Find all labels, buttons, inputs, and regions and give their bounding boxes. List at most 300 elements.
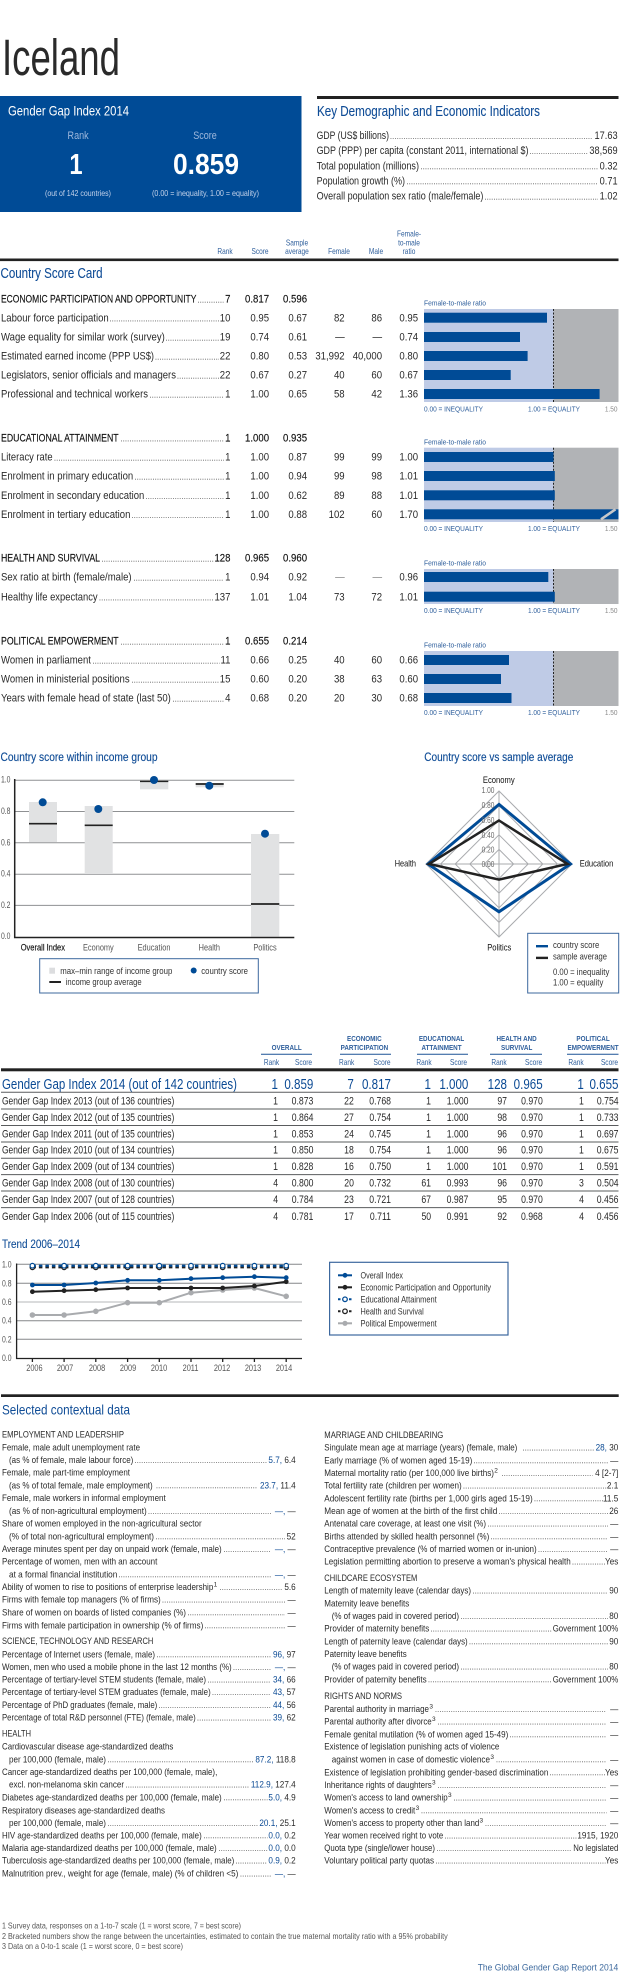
panel: childcare ecosystem: Provider of paternity benefits	[324, 1674, 427, 1684]
line chart: trend 2006-2014: 2008	[89, 1363, 106, 1373]
table column headers: Score	[450, 1057, 467, 1067]
indicator rows: 38	[334, 674, 345, 686]
indicator rows: 1.00	[399, 452, 418, 464]
line chart: trend 2006-2014	[2, 1260, 302, 1373]
chart: country score within income group: Politics	[253, 943, 277, 953]
indicator rows: 1	[225, 572, 231, 584]
historical rows: 92	[497, 1211, 507, 1223]
legend: radar chart: 0.00 = inequality	[553, 967, 610, 977]
table column headers: Rank	[264, 1057, 279, 1067]
line chart: trend 2006-2014: 1.0	[2, 1260, 12, 1270]
panel: employment and leadership: (as % of non-agricultural employment)	[9, 1506, 147, 1516]
historical rows: 0.721	[369, 1194, 391, 1206]
panel: employment and leadership: Firms with female participation in ownership (% of firms)	[2, 1620, 203, 1630]
chart: country score within income group: 0.6	[1, 837, 11, 848]
legend: income group chart	[40, 959, 258, 993]
section row: EDUCATIONAL ATTAINMENT	[1, 432, 119, 444]
indicator rows: 1.00	[250, 389, 269, 401]
historical rows: 0.970	[521, 1145, 543, 1157]
indicator rows: 10	[220, 313, 231, 325]
section row: 0.960	[283, 553, 307, 565]
score card column headers: Sample	[286, 238, 308, 248]
indicator rows: 89	[334, 491, 345, 502]
historical rows: Gender Gap Index 2007 (out of 128 countries)	[2, 1194, 174, 1206]
radar chart: country score vs sample average	[395, 774, 613, 952]
section row: 0.935	[283, 433, 307, 445]
section row: POLITICAL EMPOWERMENT	[1, 636, 119, 648]
bar chart: female-to-male ratio: 1.00 = EQUALITY	[528, 708, 580, 717]
section row: ECONOMIC PARTICIPATION AND OPPORTUNITY	[1, 294, 197, 306]
panel: rights and norms: Quota type (single/lower house)	[324, 1843, 435, 1853]
indicator rows: 99	[334, 452, 345, 464]
section row: 0.655	[245, 636, 269, 648]
line chart: trend 2006-2014: 2011	[183, 1363, 199, 1373]
title: Iceland	[2, 29, 120, 86]
panel: economic participation and opportunity	[1, 294, 618, 414]
panel: employment and leadership: —	[288, 1620, 296, 1630]
indicator rows: 0.95	[399, 313, 418, 325]
row: 2014 highlighted: 1	[272, 1076, 278, 1092]
panel: employment and leadership: 23.7, 11.4	[260, 1480, 296, 1490]
historical rows: Gender Gap Index 2013 (out of 136 countries)	[2, 1096, 174, 1108]
line chart: trend 2006-2014: 2012	[214, 1363, 231, 1373]
historical rows: 0.970	[521, 1096, 543, 1108]
bar chart: female-to-male ratio	[424, 640, 618, 717]
historical rows: 17	[344, 1211, 354, 1223]
panel: employment and leadership: at a formal financial institution	[9, 1569, 117, 1579]
bar chart: female-to-male ratio: 0.00 = INEQUALITY	[424, 708, 483, 717]
panel: marriage and childbearing: —	[610, 1518, 619, 1529]
row: 2014 highlighted: 1.000	[439, 1076, 468, 1092]
panel: Gender Gap Index 2014: (0.00 = inequality, 1.00 = equality)	[152, 188, 259, 198]
indicator rows: Labour force participation	[1, 312, 109, 324]
historical rows: 0.873	[292, 1096, 313, 1108]
historical rows: 20	[344, 1178, 354, 1190]
historical rows: 23	[344, 1194, 354, 1206]
row: 2014 highlighted: 7	[347, 1076, 354, 1092]
panel: science, technology and research: Percentage of PhD graduates (female, male)	[2, 1700, 157, 1710]
panel: rights and norms: —	[610, 1704, 619, 1714]
panel: health context: 20.1, 25.1	[259, 1818, 296, 1828]
indicator rows: 0.20	[288, 693, 307, 705]
footnotes: 3 Data on a 0-to-1 scale (1 = worst score, 0 = best score)	[2, 1942, 183, 1951]
panel: marriage and childbearing: MARRIAGE AND CHILDBEARING	[324, 1430, 443, 1440]
panel: rights and norms	[324, 1691, 619, 1866]
panel: science, technology and research: —, —	[275, 1662, 296, 1672]
indicator rows: 1.36	[399, 389, 418, 401]
historical rows: 0.784	[292, 1194, 314, 1206]
panel: health context: 112.9, 127.4	[251, 1779, 296, 1790]
row: 2014 highlighted: 1	[577, 1076, 584, 1092]
indicator rows: 0.88	[288, 510, 307, 521]
bar chart: female-to-male ratio: 1.50	[605, 406, 618, 414]
indicator rows: 1	[225, 452, 231, 464]
historical rows: 0.456	[597, 1211, 619, 1223]
panel: Gender Gap Index 2014	[0, 96, 302, 212]
historical rows: 1	[426, 1161, 431, 1173]
bar chart: female-to-male ratio: 0.00 = INEQUALITY	[424, 524, 483, 533]
table column headers: ECONOMIC	[347, 1036, 382, 1043]
line chart: trend 2006-2014: 0.8	[2, 1279, 12, 1289]
panel: health context: HEALTH	[2, 1729, 31, 1739]
chart: country score within income group: Health	[199, 943, 220, 953]
radar chart: country score vs sample average: 0.20	[482, 845, 494, 854]
score value: 0.859	[173, 149, 239, 181]
row: 2014 highlighted: 0.965	[514, 1076, 543, 1092]
panel: childcare ecosystem: (% of wages paid in covered period)	[332, 1662, 459, 1672]
panel: childcare ecosystem: 80	[609, 1611, 618, 1621]
indicator rows: 137	[214, 592, 231, 604]
bar chart: female-to-male ratio: 1.50	[605, 608, 618, 615]
panel: marriage and childbearing: —	[610, 1455, 619, 1465]
indicator rows: 0.74	[250, 332, 269, 344]
line chart: trend 2006-2014: 2010	[151, 1363, 168, 1373]
panel: science, technology and research: 44, 56	[273, 1700, 296, 1710]
panel: science, technology and research: 43, 57	[273, 1687, 296, 1697]
panel: childcare ecosystem: Length of maternity leave (calendar days)	[324, 1586, 471, 1596]
panel: employment and leadership: 5.7, 6.4	[268, 1455, 296, 1465]
panel: rights and norms: RIGHTS AND NORMS	[324, 1691, 402, 1701]
indicator rows: 60	[371, 655, 382, 667]
historical rows: 0.993	[447, 1178, 468, 1190]
historical rows: 0.970	[521, 1161, 543, 1173]
indicator rows: 0.53	[288, 351, 307, 363]
panel: health context: 5.0, 4.9	[268, 1792, 296, 1802]
panel: employment and leadership: Share of women employed in the non-agricultural sector	[2, 1519, 202, 1529]
panel: employment and leadership: —, —	[275, 1506, 296, 1516]
panel: employment and leadership	[2, 1429, 296, 1630]
historical rows: 0.750	[369, 1161, 392, 1173]
indicator rows: Healthy life expectancy	[1, 591, 98, 603]
panel: rights and norms: Existence of legislation punishing acts of violence	[324, 1742, 499, 1752]
section row: 0.596	[283, 294, 307, 306]
indicator rows	[1, 561, 418, 604]
historical rows: 95	[497, 1194, 507, 1206]
panel: employment and leadership: Female, male workers in informal employment	[2, 1493, 166, 1503]
bar chart: female-to-male ratio: Female-to-male ratio	[424, 640, 486, 650]
panel: employment and leadership: 1	[214, 1582, 218, 1588]
historical rows: 1	[579, 1112, 584, 1124]
indicator rows: 4	[225, 693, 231, 705]
line chart: trend 2006-2014: 0.0	[2, 1353, 12, 1363]
table column headers: SURVIVAL	[501, 1045, 533, 1052]
panel: childcare ecosystem: Maternity leave benefits	[324, 1598, 410, 1608]
panel: political empowerment	[1, 636, 618, 717]
legend: radar chart	[528, 933, 619, 993]
panel: health context: 0.0, 0.2	[268, 1830, 296, 1840]
panel: health context: per 100,000 (female, male)	[9, 1818, 106, 1828]
panel: marriage and childbearing: 11.5	[603, 1493, 618, 1503]
panel: rights and norms: Female genital mutilation (% of women aged 15-49)	[324, 1729, 508, 1739]
historical rows: 0.991	[447, 1211, 468, 1223]
historical rows: 1.000	[447, 1145, 469, 1157]
indicator rows: Women in ministerial positions	[1, 674, 130, 686]
panel: key demographic and economic indicators: Key Demographic and Economic Indicators	[317, 104, 540, 120]
footnotes: 1 Survey data, responses on a 1-to-7 scale (1 = worst score, 7 = best score)	[2, 1922, 241, 1930]
radar chart: country score vs sample average: 0.80	[482, 800, 494, 810]
historical rows: 0.800	[292, 1178, 314, 1190]
panel: rights and norms: 3	[429, 1704, 433, 1710]
panel: marriage and childbearing: Adolescent fertility rate (births per 1,000 girls aged 15-19)	[324, 1493, 533, 1503]
panel: health context: 0.0, 0.0	[268, 1843, 296, 1853]
indicator rows: 15	[220, 674, 231, 686]
panel: employment and leadership: (as % of female, male labour force)	[9, 1455, 133, 1465]
indicator rows: 42	[371, 389, 382, 401]
panel: health context: Cardiovascular disease age-standardized deaths	[2, 1742, 174, 1752]
historical rows: 0.697	[597, 1129, 619, 1141]
table column headers: Score	[525, 1057, 542, 1067]
indicator rows: Enrolment in primary education	[1, 471, 133, 483]
line chart: trend 2006-2014: 2014	[276, 1363, 293, 1373]
historical rows: 0.733	[597, 1112, 619, 1124]
bar chart: female-to-male ratio: 1.00 = EQUALITY	[528, 524, 580, 533]
panel: employment and leadership: Share of women on boards of listed companies (%)	[2, 1607, 186, 1617]
panel: employment and leadership: Female, male part-time employment	[2, 1468, 130, 1478]
panel: marriage and childbearing: Births attended by skilled health personnel (%)	[324, 1531, 489, 1541]
chart: country score within income group: 0.8	[1, 806, 11, 816]
row: 2014 highlighted: 128	[488, 1076, 507, 1092]
bar chart: female-to-male ratio: Female-to-male ratio	[424, 298, 486, 308]
panel: rights and norms: Yes	[605, 1767, 619, 1777]
table column headers: Rank	[416, 1057, 432, 1067]
panel: employment and leadership: Percentage of women, men with an account	[2, 1557, 158, 1567]
score card column headers	[0, 229, 618, 261]
indicator rows: 19	[220, 332, 231, 344]
indicator rows: 98	[371, 471, 382, 483]
indicator rows	[1, 302, 418, 401]
indicator rows: Literacy rate	[1, 452, 53, 464]
bar chart: female-to-male ratio: 0.00 = INEQUALITY	[424, 404, 483, 414]
historical rows: 1	[426, 1112, 431, 1124]
panel: health context: Malaria age-standardized deaths per 100,000 (female, male)	[2, 1843, 217, 1853]
row: 2014 highlighted: 0.655	[589, 1076, 618, 1092]
legend: income group chart: max–min range of income group	[60, 966, 172, 976]
table column headers: Rank	[491, 1057, 507, 1067]
legend: trend chart: Overall Index	[360, 1270, 403, 1280]
panel: childcare ecosystem	[324, 1573, 618, 1684]
historical rows: 0.754	[597, 1096, 619, 1108]
panel: marriage and childbearing: Early marriage (% of women aged 15-19)	[324, 1455, 472, 1465]
indicator rows: 1.01	[399, 592, 418, 604]
table column headers: HEALTH AND	[496, 1036, 537, 1043]
bar chart: female-to-male ratio	[424, 558, 618, 615]
panel: rights and norms: Yes	[605, 1855, 619, 1866]
panel: rights and norms: Women's access to land ownership	[324, 1793, 448, 1803]
indicator rows: 40	[334, 370, 345, 382]
panel: rights and norms: 3	[432, 1716, 436, 1723]
chart: country score within income group: Economy	[83, 943, 115, 953]
row: 2014 highlighted: Gender Gap Index 2014 (out of 142 countries)	[2, 1077, 237, 1093]
panel: childcare ecosystem: CHILDCARE ECOSYSTEM	[324, 1573, 417, 1583]
panel: marriage and childbearing: 4 [2-7]	[595, 1468, 618, 1478]
legend: income group chart: country score	[201, 966, 248, 976]
historical rows: Gender Gap Index 2006 (out of 115 countries)	[2, 1211, 174, 1223]
heading: selected contextual data: Selected contextual data	[2, 1401, 130, 1417]
panel: marriage and childbearing: 26	[609, 1506, 618, 1516]
panel: childcare ecosystem: Provider of maternity benefits	[324, 1624, 430, 1634]
panel: rights and norms: —	[610, 1780, 619, 1790]
historical rows: 24	[344, 1129, 354, 1141]
table column headers: POLITICAL	[576, 1036, 610, 1043]
section row	[1, 553, 307, 565]
panel: rights and norms: —	[610, 1729, 619, 1739]
historical rows: Gender Gap Index 2009 (out of 134 countries)	[2, 1161, 174, 1173]
score card column headers: ratio	[403, 246, 415, 256]
indicator rows: 1.00	[250, 471, 269, 483]
table column headers: OVERALL	[272, 1045, 302, 1052]
section row: 0.817	[245, 294, 269, 306]
historical rows: 16	[344, 1161, 354, 1173]
historical rows: 1	[273, 1096, 278, 1108]
panel: science, technology and research: Percentage of total R&D personnel (FTE) (female, male)	[2, 1713, 196, 1723]
historical rows: 96	[497, 1129, 507, 1141]
chart: country score within income group: 0.4	[1, 869, 11, 879]
radar chart: country score vs sample average: 0.00	[482, 859, 494, 869]
historical rows: 0.970	[521, 1194, 543, 1206]
indicator rows: 0.65	[288, 389, 307, 401]
historical rows: 1	[426, 1145, 431, 1157]
panel: employment and leadership: —	[288, 1607, 296, 1617]
historical rows: 1	[273, 1145, 278, 1157]
panel: rights and norms: Parental authority in marriage	[324, 1704, 429, 1714]
panel: employment and leadership: —, —	[275, 1544, 296, 1554]
radar chart: country score vs sample average: Education	[580, 858, 613, 868]
panel: rights and norms: 3	[432, 1780, 436, 1786]
panel: health context: per 100,000 (female, male)	[9, 1754, 106, 1764]
indicator rows: Wage equality for similar work (survey)	[1, 332, 165, 344]
historical rows: 0.987	[447, 1194, 468, 1206]
line chart: trend 2006-2014: 2013	[245, 1363, 262, 1373]
score card column headers: Male	[369, 246, 383, 256]
panel: marriage and childbearing: Singulate mean age at marriage (years) (female, male)	[324, 1443, 517, 1453]
section row	[1, 432, 307, 445]
indicator rows: 0.61	[288, 332, 307, 344]
line chart: trend 2006-2014: 2009	[120, 1363, 137, 1373]
panel: employment and leadership: 52	[287, 1531, 296, 1541]
panel: health and survival	[1, 553, 618, 615]
historical rows: Gender Gap Index 2008 (out of 130 countries)	[2, 1177, 174, 1189]
panel: health context: Respiratory diseases age-standardized deaths	[2, 1805, 165, 1815]
legend: trend chart: Health and Survival	[360, 1306, 424, 1316]
historical rows: 0.732	[369, 1178, 391, 1190]
bar chart: female-to-male ratio	[424, 438, 618, 533]
indicator rows: 0.92	[288, 572, 307, 584]
table column headers: Score	[295, 1057, 312, 1067]
historical rows: 101	[492, 1161, 507, 1173]
panel: childcare ecosystem: 80	[609, 1661, 618, 1672]
indicator rows: 1.70	[399, 510, 418, 521]
table: gender gap index history	[1, 1036, 619, 1223]
indicator rows: 1.01	[399, 491, 418, 502]
legend: income group chart: income group average	[66, 977, 142, 987]
line chart: trend 2006-2014: 0.6	[2, 1297, 12, 1307]
indicator rows: 40,000	[353, 351, 382, 363]
panel: health context: 87.2, 118.8	[255, 1754, 296, 1764]
panel: marriage and childbearing: 2	[494, 1468, 498, 1474]
historical rows: 4	[273, 1211, 279, 1223]
historical rows: 0.675	[597, 1145, 619, 1157]
footnotes: 2 Bracketed numbers show the range between the uncertainties, estimated to contain the true maternal mortality ratio with a 95% probability	[2, 1932, 448, 1941]
historical rows: 1	[579, 1145, 584, 1157]
indicator rows: —	[373, 332, 383, 344]
table column headers: Rank	[339, 1057, 355, 1067]
indicator rows: 1.01	[250, 592, 269, 604]
panel: health context: Tuberculosis age-standardized deaths per 100,000 (female, male)	[2, 1856, 234, 1866]
panel: childcare ecosystem: (% of wages paid in covered period)	[332, 1611, 459, 1621]
bar chart: female-to-male ratio	[424, 298, 618, 414]
indicator rows: 0.87	[288, 452, 307, 464]
historical rows: 0.768	[369, 1096, 391, 1108]
panel: Gender Gap Index 2014: Score	[193, 130, 217, 142]
radar chart: country score vs sample average: 0.40	[482, 830, 494, 840]
indicator rows: Enrolment in tertiary education	[1, 509, 130, 521]
historical rows: 0.864	[292, 1112, 314, 1124]
historical rows: 1	[579, 1096, 584, 1108]
indicator rows: 0.66	[399, 655, 418, 667]
panel: key demographic and economic indicators: 17.63	[595, 130, 618, 142]
indicator rows	[1, 644, 418, 705]
panel: key demographic and economic indicators: GDP (PPP) per capita (constant 2011, international $)	[317, 145, 528, 157]
section row: 0.965	[245, 553, 269, 565]
indicator rows: 60	[371, 510, 382, 521]
panel: science, technology and research: SCIENCE, TECHNOLOGY AND RESEARCH	[2, 1636, 153, 1646]
radar chart: country score vs sample average: Politics	[487, 942, 511, 952]
heading: country score vs sample average: Country score vs sample average	[424, 752, 573, 764]
indicator rows: 30	[371, 693, 382, 705]
indicator rows: 1.00	[250, 510, 269, 521]
historical rows: 0.970	[521, 1112, 543, 1124]
rank value: 1	[69, 148, 83, 181]
section row: HEALTH AND SURVIVAL	[1, 553, 100, 565]
panel: marriage and childbearing: —	[610, 1544, 619, 1554]
panel: marriage and childbearing: 28, 30	[596, 1442, 618, 1453]
panel: key demographic and economic indicators: GDP (US$ billions)	[317, 130, 389, 142]
indicator rows	[1, 441, 418, 521]
section row: 1.000	[245, 433, 269, 445]
panel: rights and norms: 1915, 1920	[577, 1830, 618, 1841]
heading: trend 2006-2014: Trend 2006–2014	[2, 1239, 81, 1251]
legend: radar chart: sample average	[553, 952, 607, 962]
indicator rows: Years with female head of state (last 50)	[1, 693, 171, 705]
legend: radar chart: 1.00 = equality	[553, 977, 604, 987]
indicator rows: Professional and technical workers	[1, 389, 148, 401]
historical rows: 1.000	[447, 1096, 469, 1108]
panel: marriage and childbearing: —	[610, 1531, 619, 1541]
panel: health context: excl. non-melanoma skin cancer	[9, 1780, 124, 1790]
panel: rights and norms: Year women received right to vote	[324, 1831, 443, 1841]
historical rows: 4	[579, 1211, 584, 1223]
indicator rows: 1.00	[250, 491, 269, 502]
historical rows: 96	[497, 1178, 507, 1190]
panel: childcare ecosystem: Length of paternity leave (calendar days)	[324, 1636, 468, 1646]
panel: key demographic and economic indicators	[317, 96, 618, 203]
historical rows: 0.456	[597, 1194, 619, 1206]
panel: rights and norms: Parental authority after divorce	[324, 1717, 432, 1727]
historical rows: 61	[421, 1178, 431, 1190]
historical rows: 0.970	[521, 1178, 543, 1190]
indicator rows: 60	[371, 370, 382, 382]
historical rows: 0.968	[521, 1211, 543, 1223]
indicator rows: 0.80	[399, 351, 418, 363]
indicator rows: 73	[334, 592, 345, 604]
panel: rights and norms: —	[610, 1716, 619, 1727]
table column headers: ATTAINMENT	[422, 1045, 462, 1052]
historical rows: 67	[421, 1194, 431, 1206]
panel: marriage and childbearing: 2.1	[607, 1480, 618, 1491]
panel: marriage and childbearing	[324, 1430, 619, 1567]
indicator rows: 0.80	[250, 351, 269, 363]
line chart: trend 2006-2014: 0.4	[2, 1316, 12, 1326]
